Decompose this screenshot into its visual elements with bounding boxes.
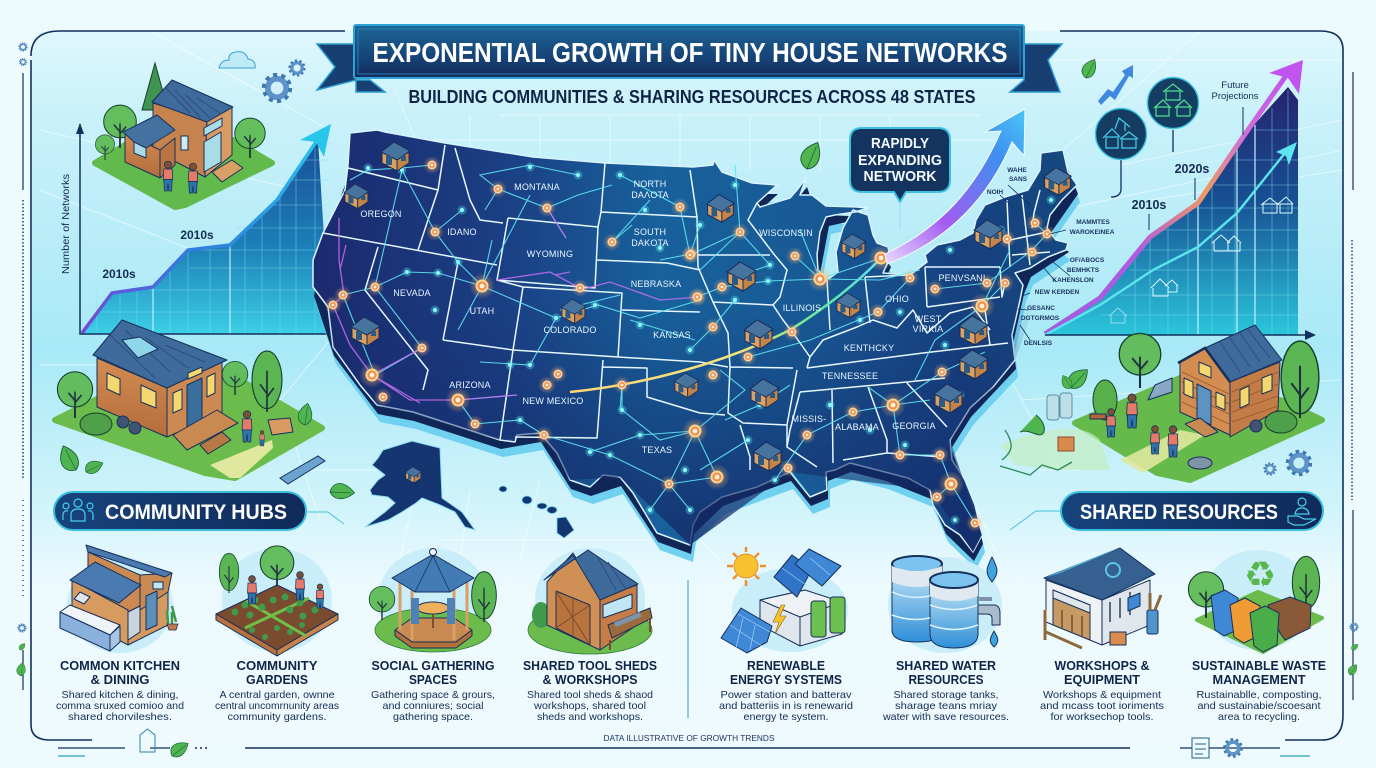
line chart: left growth: [61, 123, 331, 334]
northeast labels: OF/ABOCS: [1070, 257, 1105, 264]
heading pill: community hubs: COMMUNITY HUBS: [105, 501, 287, 524]
northeast labels: NEW KERDEN: [1035, 289, 1080, 296]
card text: [371, 658, 495, 723]
inset: Hawaii: [499, 486, 574, 538]
card text: SPACES: [409, 672, 457, 687]
card text: A central garden, ownne: [220, 689, 335, 701]
small chart houses: [1109, 197, 1293, 323]
heading pill: community hubs: [54, 492, 344, 530]
icon: kitchen house: [60, 545, 178, 653]
state labels: NEVADA: [393, 288, 431, 298]
card text: [719, 658, 853, 723]
purple route: [333, 208, 700, 403]
state labels: MISSIS-: [792, 414, 826, 424]
line chart: right growth: [1045, 58, 1316, 340]
card text: SHARED TOOL SHEDS: [523, 658, 657, 673]
year labels: [1132, 162, 1209, 212]
icon: house cluster green: [1148, 78, 1198, 152]
orange bin: [1230, 598, 1260, 643]
card text: and conniures; social: [382, 700, 484, 712]
sun: [727, 547, 766, 586]
card text: [1192, 658, 1326, 723]
map landmass: [313, 130, 1077, 552]
card text: and batteriis in is renewarid: [719, 700, 853, 712]
tiny house markers: [344, 142, 1071, 471]
card text: COMMUNITY: [236, 658, 318, 673]
arrow: expanding network: [885, 109, 1025, 264]
card text: MANAGEMENT: [1212, 672, 1306, 687]
callout: rapidly expanding network: NETWORK: [864, 168, 937, 185]
state labels: TEXAS: [642, 445, 672, 455]
state labels: ALABAMA: [835, 422, 879, 432]
northeast labels: DENLSIS: [1024, 340, 1053, 347]
state labels: NEBRASKA: [631, 279, 681, 289]
axis label: Number of Networks: [61, 174, 72, 274]
northeast labels: [987, 167, 1115, 347]
northeast labels: GESANC: [1027, 305, 1055, 312]
state labels: NORTH: [634, 179, 666, 189]
green bin: [1250, 606, 1279, 652]
highlighted expansion route: [570, 258, 881, 392]
illustration: top-left tiny house: [95, 63, 272, 207]
icon: gears: [264, 61, 304, 101]
state labels: ARIZONA: [449, 380, 491, 390]
decade labels: 2010s: [180, 228, 214, 242]
icon: caring hand: [1288, 498, 1316, 525]
icon: recycling bins: [1188, 550, 1322, 652]
card text: workshops, shared tool: [533, 700, 646, 712]
card text: energy te system.: [744, 711, 828, 723]
card text: Power station and batterav: [720, 689, 852, 701]
state labels: MONTANA: [514, 182, 560, 192]
card text: RESOURCES: [908, 672, 984, 687]
card text: [56, 658, 184, 723]
icon: house cluster teal: [1096, 108, 1146, 197]
card text: [1040, 658, 1164, 723]
teal nodes: [364, 162, 1056, 524]
state labels: UTAH: [470, 306, 494, 316]
illustration: bottom-left tiny house: [53, 320, 355, 501]
card text: sharage teans mriay: [895, 700, 998, 712]
card: workshops and equipment: [1040, 548, 1164, 723]
heading pill: shared resources: [1010, 492, 1323, 530]
card text: & WORKSHOPS: [542, 672, 638, 687]
card text: Shared tool sheds & shaod: [527, 689, 653, 701]
card text: comma sruxed comioo and: [56, 700, 184, 712]
icon: people: [63, 499, 93, 521]
card text: sheds and workshops.: [537, 711, 643, 723]
card: shared water resources: [882, 556, 1009, 723]
card text: Shared storage tanks,: [894, 689, 998, 701]
footer note: DATA ILLUSTRATIVE OF GROWTH TRENDS: [604, 734, 774, 743]
card text: [215, 658, 339, 723]
card text: and mcass toot ioriments: [1040, 700, 1164, 712]
card: shared tool sheds: [523, 548, 657, 723]
card text: GARDENS: [246, 672, 308, 687]
growth line and arrow: [82, 124, 331, 333]
card: community gardens: [215, 546, 339, 723]
card text: gathering space.: [393, 711, 473, 723]
inset: Alaska: [365, 441, 475, 530]
recycle symbol: ♻: [1244, 555, 1276, 596]
state borders: [323, 145, 1050, 470]
future projections label: Future: [1221, 80, 1249, 91]
card text: & DINING: [90, 672, 150, 687]
northeast labels: MAMMTES: [1076, 219, 1110, 226]
state labels: WISCONSIN: [759, 228, 813, 238]
state labels: WEST: [915, 314, 942, 324]
card text: SOCIAL GATHERING: [372, 658, 494, 673]
icon: cloud: [219, 52, 255, 68]
state labels: KENTHCKY: [844, 343, 894, 353]
state labels: COLORADO: [543, 325, 597, 335]
state labels: IDANO: [447, 227, 477, 237]
card text: Workshops & equipment: [1043, 689, 1161, 701]
icon: raised garden beds: [216, 546, 338, 656]
northeast labels: WAHE: [1007, 167, 1027, 174]
northeast labels: WAROKEINEA: [1070, 229, 1115, 236]
card text: WORKSHOPS &: [1054, 658, 1150, 673]
icon: small arrow: [1098, 65, 1133, 105]
state labels: DAΛOTA: [631, 190, 669, 200]
state labels: PENVSANI: [938, 273, 986, 283]
title text: EXPONENTIAL GROWTH OF TINY HOUSE NETWORKS: [372, 37, 1008, 68]
northeast labels: BEMHKTS: [1067, 267, 1100, 274]
icon: tool shed: [528, 548, 652, 654]
callout: rapidly expanding network: RAPIDLY: [871, 135, 929, 152]
card text: SHARED WATER: [896, 658, 997, 673]
subtitle: BUILDING COMMUNITIES & SHARING RESOURCES ACROSS 48 STATES: [408, 87, 976, 107]
upper growth line: [1045, 60, 1303, 334]
northeast labels: KAHENSLON: [1052, 277, 1094, 284]
card text: RENEWABLE: [747, 658, 825, 673]
card: social gathering spaces: [369, 548, 496, 723]
card text: central uncomrnunity areas: [215, 700, 339, 712]
decade labels: [102, 228, 214, 281]
card text: EQUIPMENT: [1064, 672, 1140, 687]
year labels: 2010s: [1132, 198, 1166, 212]
state labels: DAKOTA: [631, 238, 669, 248]
divider between groups: [687, 580, 689, 718]
card text: and sustainabie/scoesant: [1198, 700, 1321, 712]
state labels: TENNESSEE: [822, 371, 878, 381]
card text: Gathering space & grours,: [371, 689, 495, 701]
card text: shared chorvileshes.: [68, 711, 172, 723]
state labels: SOUTH: [634, 227, 666, 237]
card text: [882, 658, 1009, 723]
card text: area to recycling.: [1218, 711, 1300, 723]
blue bin: [1211, 590, 1238, 636]
card: renewable energy systems: [719, 547, 853, 723]
card text: water with save resources.: [882, 711, 1009, 723]
card text: [523, 658, 657, 723]
decade labels: 2010s: [102, 267, 136, 281]
card text: COMMON KITCHEN: [60, 658, 180, 673]
state labels: KANSAS: [653, 330, 691, 340]
northeast labels: SANS: [1009, 176, 1028, 183]
state labels: OREGON: [360, 209, 402, 219]
chart axes: [76, 123, 330, 334]
card text: SUSTAINABLE WASTE: [1192, 658, 1326, 673]
state labels: NEW MEXICO: [522, 396, 584, 406]
icon: workshop barn: [1044, 548, 1161, 648]
card text: Shared kitchen & dining,: [62, 689, 178, 701]
heading pill: shared resources: SHARED RESOURCES: [1080, 501, 1278, 524]
state labels: GEORGIA: [892, 421, 936, 431]
callout: rapidly expanding network: EXPANDING: [858, 152, 942, 169]
lower growth line: [1045, 142, 1297, 335]
map: United States network: [313, 130, 1115, 569]
card: sustainable waste management: [1188, 550, 1326, 723]
icon: water tanks: [888, 556, 1002, 653]
state labels: WYOMING: [527, 249, 573, 259]
card text: community gardens.: [228, 711, 326, 723]
future projections label: [1212, 80, 1259, 102]
illustration: right tiny house: [1000, 325, 1322, 480]
card text: Rustainablle, composting,: [1196, 689, 1322, 701]
state labels: [360, 179, 986, 455]
ribbon tails: [317, 44, 1062, 92]
map depth shadow: [314, 139, 1080, 569]
icon: green leaf near callout: [800, 141, 821, 170]
network links: [343, 165, 1047, 523]
icon: solar power station: [721, 547, 848, 653]
future projections label: Projections: [1212, 91, 1259, 102]
card: common kitchen and dining: [56, 545, 184, 723]
card text: ENERGY SYSTEMS: [730, 672, 842, 687]
callout: rapidly expanding network: [850, 128, 950, 228]
year labels: 2020s: [1175, 162, 1209, 176]
northeast labels: NOIH: [987, 189, 1003, 196]
northeast labels: DGTGRMOS: [1021, 315, 1060, 322]
axis: [1045, 330, 1316, 340]
hub nodes: [324, 156, 1056, 532]
state labels: ILLINOIS: [783, 303, 821, 313]
icon: leaf: [1081, 58, 1097, 79]
state labels: VIRKIA: [913, 324, 943, 334]
compost box: [1268, 597, 1311, 640]
icon: gazebo: [369, 548, 496, 652]
title banner: [317, 25, 1062, 92]
state labels: OHIO: [885, 294, 909, 304]
card text: for worksechop tools.: [1050, 711, 1154, 723]
